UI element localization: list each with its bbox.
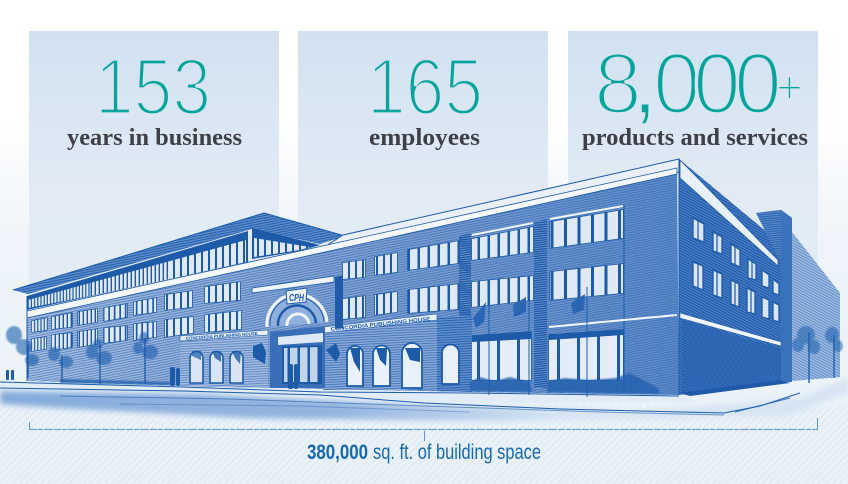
stat number: 8,000+: + (776, 61, 803, 113)
trees right (792, 326, 843, 383)
stat label: products and services: products and services (582, 125, 808, 151)
shrubs (60, 373, 660, 394)
low entrance block, left (180, 330, 268, 388)
low entrance block, right (323, 314, 472, 392)
front facade wall (27, 159, 679, 395)
left wing windows (32, 282, 241, 351)
stat number: 8,000+: 0 (734, 36, 782, 132)
stat number: 8,000+: , (633, 36, 657, 132)
building illustration (6, 159, 843, 397)
people (6, 364, 298, 389)
side base details (679, 380, 790, 396)
building space caption: 380,000 (307, 441, 368, 464)
building space caption: sq. ft. of building space (373, 441, 541, 464)
dimension line (30, 418, 818, 441)
building space caption (307, 441, 541, 464)
panel: years in business (29, 31, 279, 311)
panel: products and services (568, 31, 818, 311)
side facade (679, 159, 840, 395)
left wing roof (13, 213, 345, 294)
side facade windows (693, 218, 779, 322)
stat number: 8,000+: 0 (693, 36, 741, 132)
stat number: 153: 153 (95, 42, 211, 131)
street and sidewalk sketch (0, 378, 848, 421)
chimney (756, 210, 792, 382)
trees left (6, 326, 158, 384)
CPH sign: CPH (289, 293, 305, 304)
stat number: 8,000+: 8 (594, 36, 642, 132)
canopy sign text, left: CONCORDIA PUBLISHING HOUSE (186, 331, 258, 341)
street lamps with banners (473, 287, 587, 397)
stat number: 165: 165 (367, 42, 483, 131)
stat label: employees: employees (369, 125, 480, 151)
panel: employees (298, 31, 548, 311)
main entrance with arch (252, 275, 343, 388)
stat number: 8,000+ (594, 36, 803, 132)
right wing windows (343, 206, 677, 380)
left wing top floor windows (27, 228, 320, 310)
stat number: 8,000+: 0 (653, 36, 701, 132)
canopy sign text, right: CONCORDIA PUBLISHING HOUSE (331, 317, 431, 333)
stat label: years in business: years in business (67, 125, 242, 151)
